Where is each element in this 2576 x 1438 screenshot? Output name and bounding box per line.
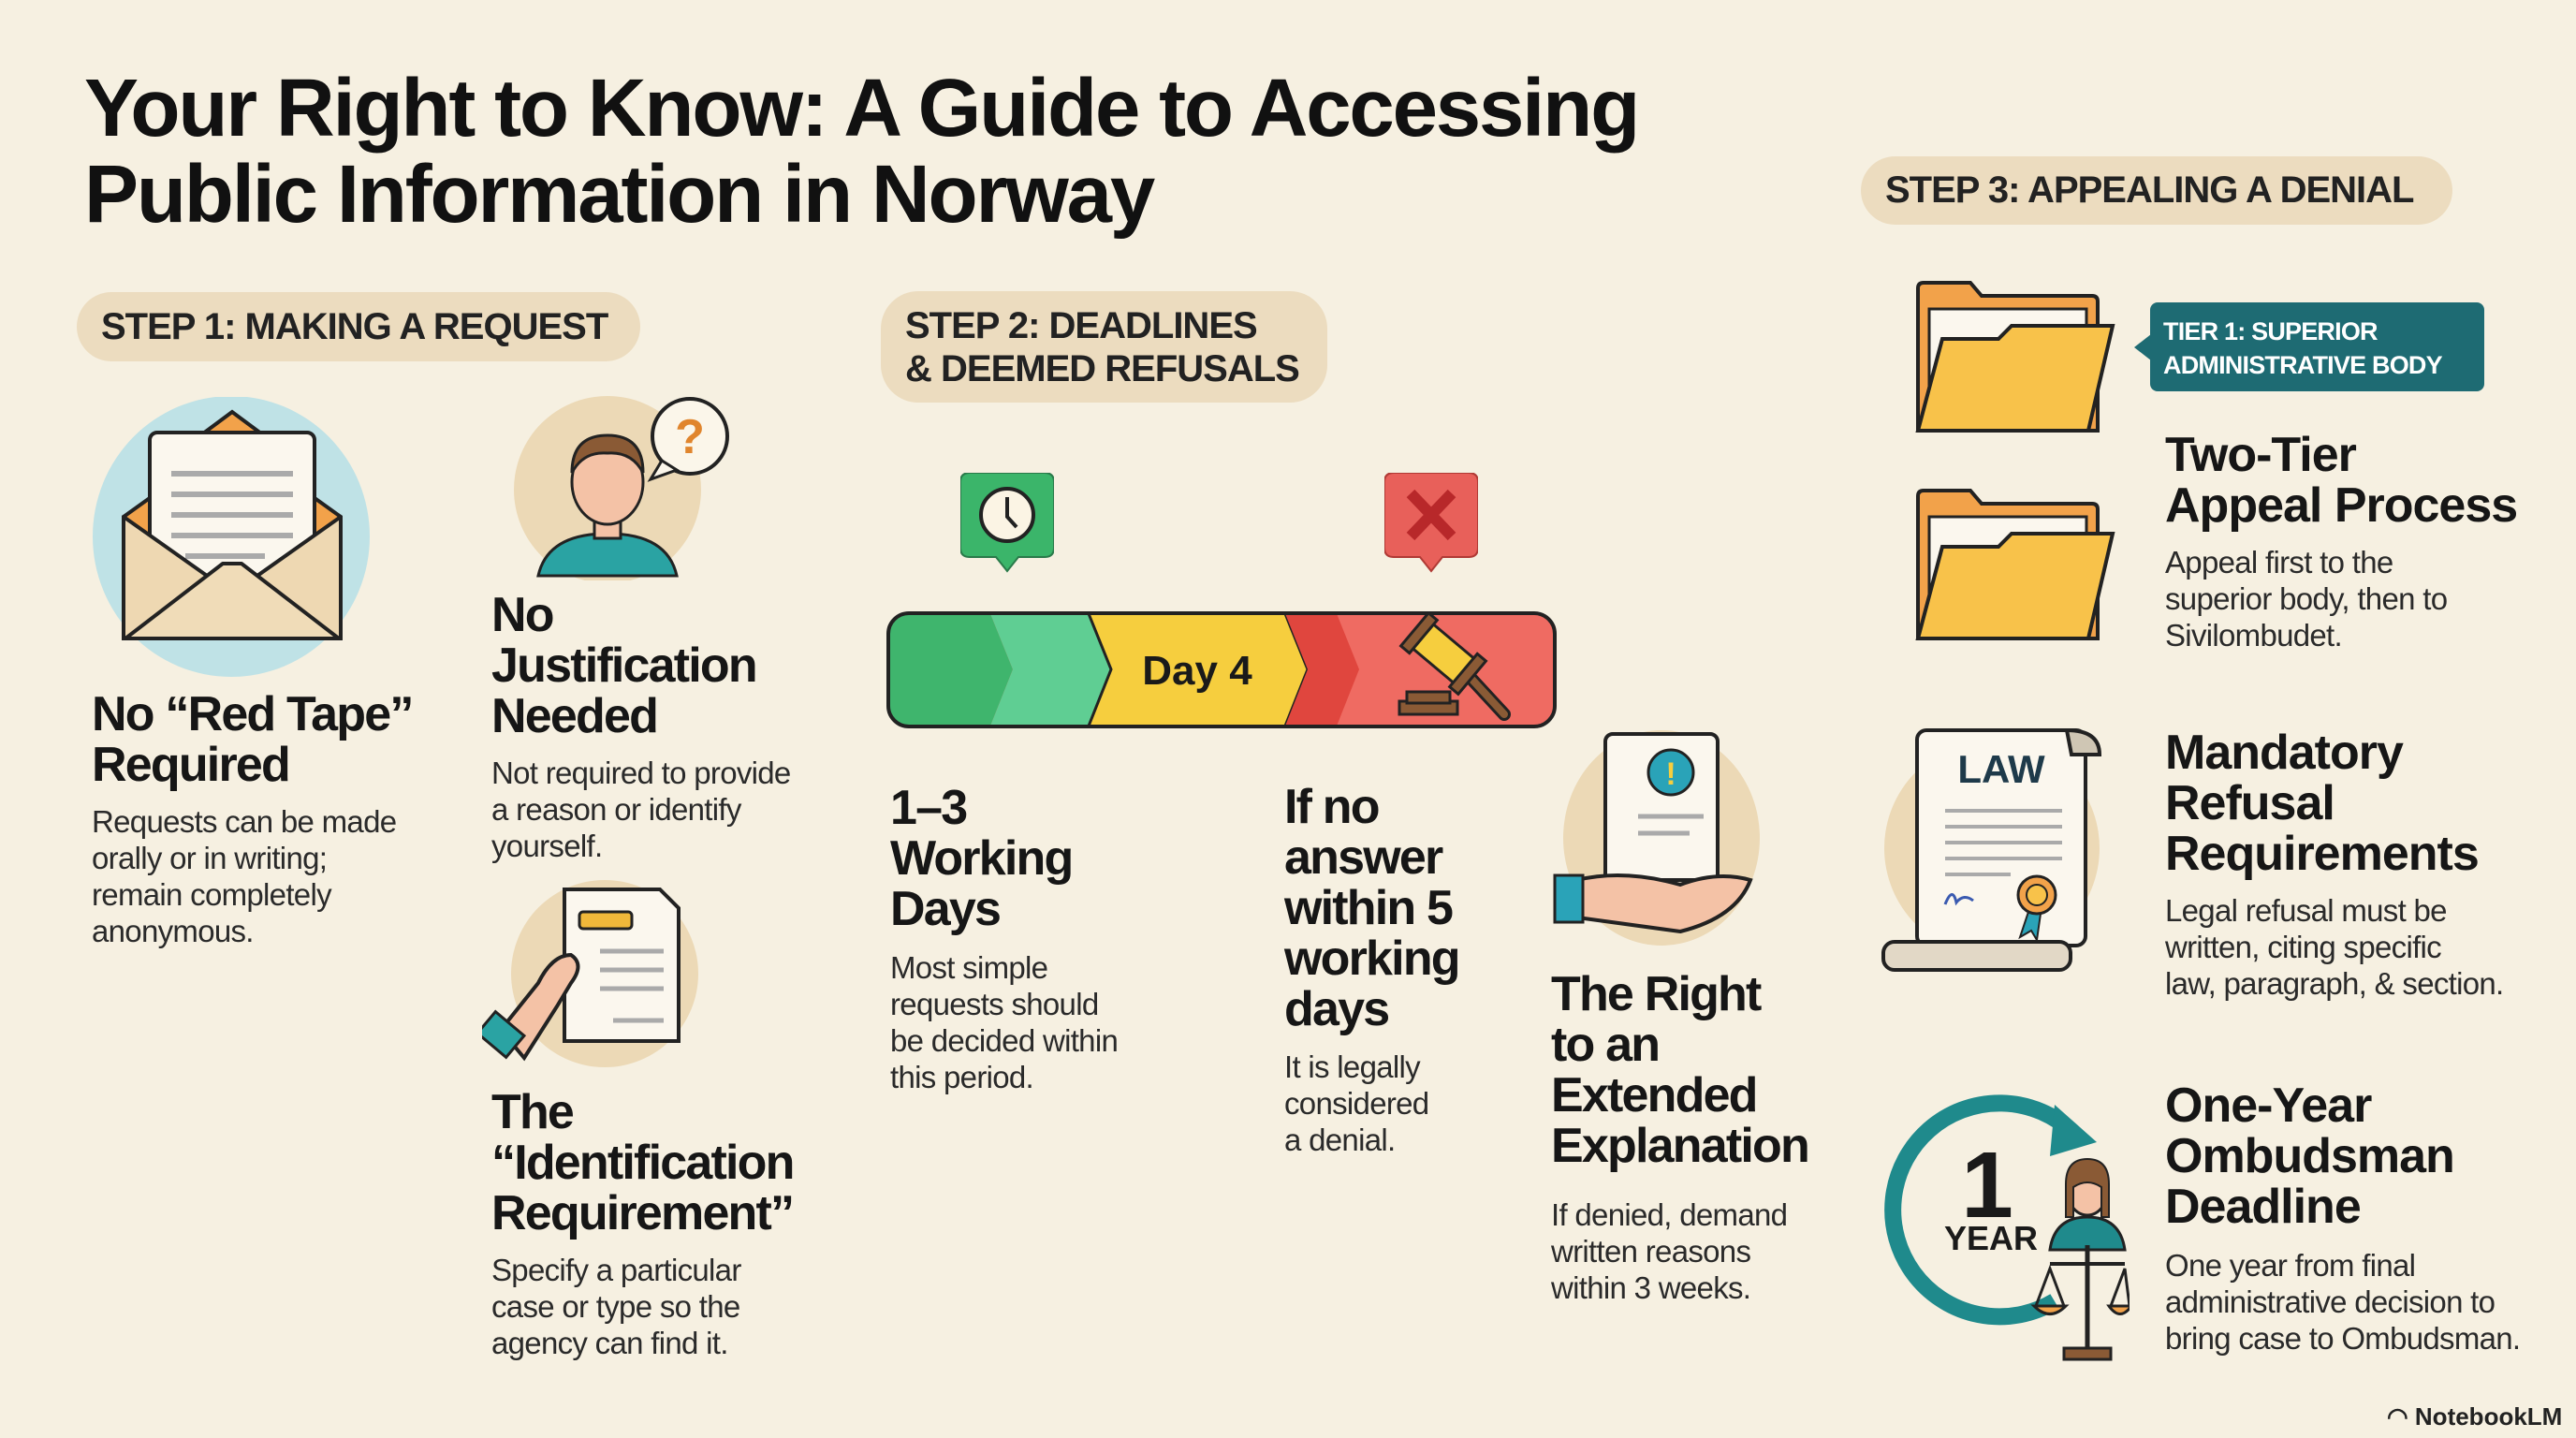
step 3 pill: STEP 3: APPEALING A DENIAL — [1885, 169, 2413, 211]
body: 1-3 — [890, 950, 1118, 1094]
body: no justification — [491, 756, 791, 863]
heading: if no answer: If no — [1284, 780, 1379, 834]
body: if no answer: a denial. — [1284, 1123, 1395, 1157]
heading: one-year deadline — [2165, 1078, 2454, 1234]
heading: if no answer: working — [1284, 932, 1459, 986]
icon: one year — [1884, 1094, 2130, 1361]
body: if no answer: considered — [1284, 1086, 1428, 1121]
body: mandatory refusal: law, paragraph, & section. — [2165, 966, 2504, 1001]
heading: extended explanation: Extended — [1551, 1068, 1757, 1123]
heading: no justification — [491, 588, 756, 743]
heading: if no answer: within 5 — [1284, 881, 1452, 935]
body: two-tier — [2165, 545, 2447, 653]
body: identification: case or type so the — [491, 1289, 740, 1324]
body: two-tier: superior body, then to — [2165, 581, 2447, 616]
callout: tier 1: ADMINISTRATIVE BODY — [2163, 351, 2442, 379]
body: one-year: bring case to Ombudsman. — [2165, 1321, 2520, 1356]
body: mandatory refusal: written, citing specific — [2165, 930, 2441, 964]
body: 1-3: this period. — [890, 1060, 1033, 1094]
body: no red tape — [92, 804, 396, 948]
icon: document in hand — [482, 880, 698, 1067]
body: one-year — [2165, 1248, 2520, 1356]
icon: red x pin — [1384, 473, 1478, 573]
heading: no red tape: Required — [92, 738, 289, 792]
heading: no red tape — [92, 687, 413, 792]
heading: mandatory refusal: Requirements — [2165, 827, 2479, 881]
icon: scroll in hand: ! — [1665, 756, 1676, 792]
heading: no justification: Justification — [491, 638, 756, 693]
icon: green clock pin — [960, 473, 1054, 573]
body: extended explanation: written reasons — [1551, 1234, 1750, 1269]
body: two-tier: Appeal first to the — [2165, 545, 2393, 580]
icon: folder 2 — [1915, 489, 2115, 640]
heading: two-tier — [2165, 428, 2517, 533]
body: no justification: Not required to provide — [491, 756, 791, 790]
body: no red tape: remain completely — [92, 877, 331, 912]
heading: extended explanation — [1551, 967, 1808, 1173]
watermark: ◠ NotebookLM — [2387, 1402, 2562, 1431]
body: extended explanation: within 3 weeks. — [1551, 1270, 1750, 1305]
heading: identification requirement — [491, 1085, 794, 1240]
body: mandatory refusal — [2165, 893, 2504, 1001]
body: no justification: a reason or identify — [491, 792, 741, 827]
step 1 pill — [77, 292, 640, 361]
heading: extended explanation: Explanation — [1551, 1119, 1808, 1173]
heading: one-year deadline: One-Year — [2165, 1078, 2371, 1133]
body: identification — [491, 1253, 741, 1360]
icon: folder 1 — [1915, 281, 2115, 433]
heading: two-tier: Two-Tier — [2165, 428, 2356, 482]
body: no red tape: Requests can be made — [92, 804, 396, 839]
step 2 pill: STEP 2: DEADLINES — [905, 305, 1257, 346]
callout: tier 1 — [2134, 302, 2484, 391]
icon: law document: LAW — [1957, 747, 2045, 791]
body: identification: agency can find it. — [491, 1326, 728, 1360]
body: extended explanation: If denied, demand — [1551, 1197, 1787, 1232]
timeline bar: Day 4 — [1142, 648, 1252, 694]
heading: one-year deadline: Ombudsman — [2165, 1129, 2454, 1183]
body: one-year: administrative decision to — [2165, 1284, 2495, 1319]
step 3 pill — [1861, 156, 2452, 225]
body: mandatory refusal: Legal refusal must be — [2165, 893, 2447, 928]
heading: mandatory refusal: Mandatory — [2165, 726, 2403, 780]
step 2 pill: & DEEMED REFUSALS — [905, 348, 1299, 389]
heading: identification requirement: The — [491, 1085, 573, 1139]
title — [84, 63, 1638, 240]
heading: 1-3 working days: Days — [890, 882, 1000, 936]
icon: scroll in hand — [1554, 730, 1760, 946]
body: one-year: One year from final — [2165, 1248, 2415, 1283]
step 2 pill — [881, 291, 1327, 403]
callout: tier 1: TIER 1: SUPERIOR — [2163, 317, 2378, 345]
heading: 1-3 working days: 1–3 — [890, 781, 966, 835]
icon: one year: YEAR — [1944, 1219, 2038, 1257]
heading: if no answer: days — [1284, 982, 1388, 1036]
heading: if no answer — [1284, 780, 1459, 1036]
body: no justification: yourself. — [491, 829, 602, 863]
title: Public Information in Norway — [84, 149, 1153, 240]
heading: identification requirement: “Identification — [491, 1136, 794, 1190]
heading: no red tape: No “Red Tape” — [92, 687, 413, 741]
heading: mandatory refusal — [2165, 726, 2479, 881]
body: if no answer: It is legally — [1284, 1049, 1420, 1084]
body: no red tape: anonymous. — [92, 914, 254, 948]
icon: person with question — [514, 396, 729, 580]
heading: 1-3 working days: Working — [890, 831, 1072, 886]
heading: no justification: Needed — [491, 689, 657, 743]
heading: identification requirement: Requirement” — [491, 1186, 793, 1240]
heading: mandatory refusal: Refusal — [2165, 776, 2334, 830]
body: if no answer — [1284, 1049, 1428, 1157]
body: 1-3: Most simple — [890, 950, 1047, 985]
heading: extended explanation: to an — [1551, 1018, 1659, 1072]
icon: person with question: ? — [675, 410, 705, 464]
gavel — [1399, 613, 1504, 714]
heading: no justification: No — [491, 588, 553, 642]
heading: if no answer: answer — [1284, 830, 1442, 885]
icon: envelope — [93, 397, 370, 677]
body: 1-3: requests should — [890, 987, 1098, 1021]
heading: one-year deadline: Deadline — [2165, 1180, 2361, 1234]
step 1 pill: STEP 1: MAKING A REQUEST — [101, 305, 607, 346]
body: identification: Specify a particular — [491, 1253, 741, 1287]
heading: two-tier: Appeal Process — [2165, 478, 2517, 533]
title: Your Right to Know: A Guide to Accessing — [84, 63, 1638, 154]
icon: law document — [1881, 728, 2101, 972]
heading: extended explanation: The Right — [1551, 967, 1761, 1021]
heading: 1-3 working days — [890, 781, 1072, 936]
body: two-tier: Sivilombudet. — [2165, 618, 2342, 653]
timeline bar — [886, 611, 1557, 728]
body: no red tape: orally or in writing; — [92, 841, 327, 875]
icon: one year: 1 — [1961, 1133, 2013, 1238]
body: extended explanation — [1551, 1197, 1787, 1305]
body: 1-3: be decided within — [890, 1023, 1118, 1058]
